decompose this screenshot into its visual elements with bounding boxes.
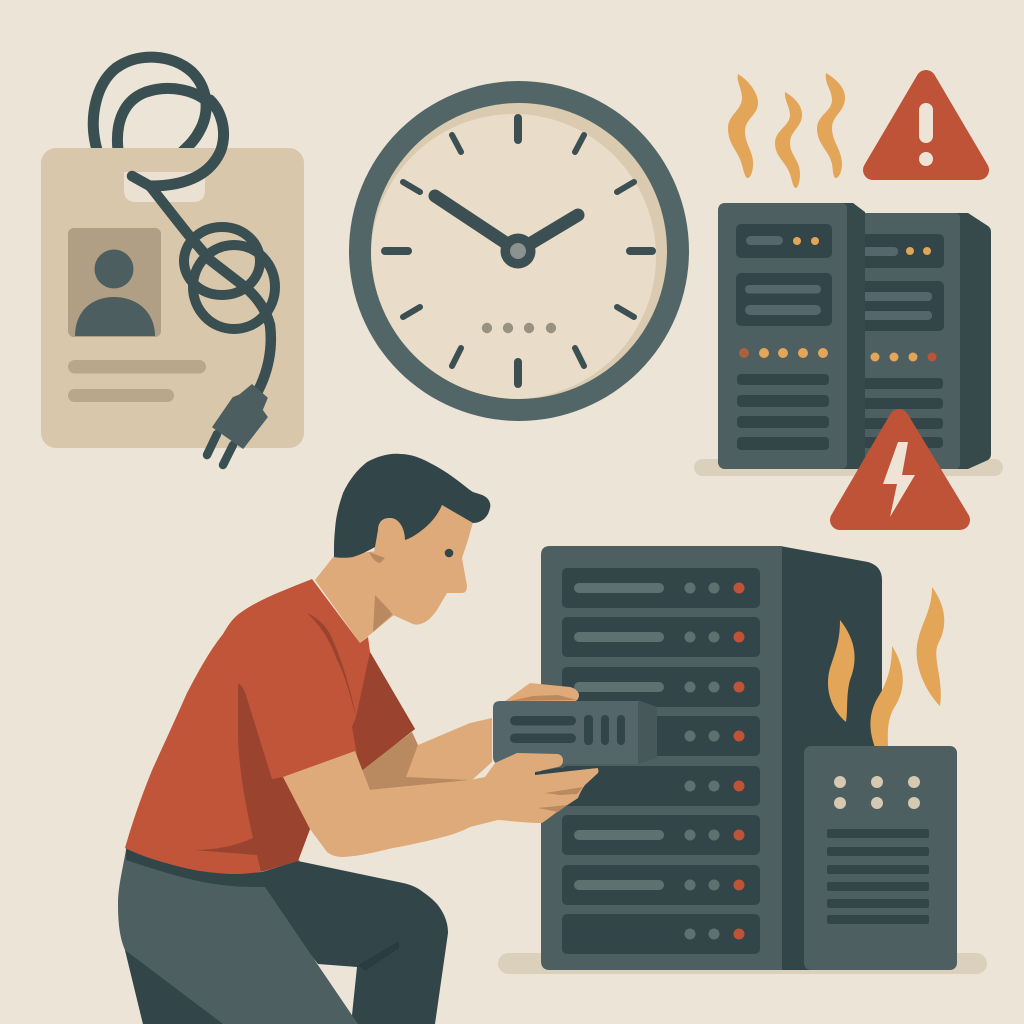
clock hub cap [510,243,526,259]
lower leg shade [125,950,223,1024]
rack front [541,546,782,970]
ear shadow [369,552,385,563]
shirt [125,579,415,874]
far arm [360,718,492,790]
floor shadow [498,953,987,974]
near arm and hand [283,751,598,857]
cord loops behind badge [93,57,212,154]
finger shadows [538,787,583,812]
rack units [562,568,760,954]
clock face shade [371,103,667,399]
left leg [118,850,358,1024]
clock dots [482,323,556,333]
panel: wall clock [349,81,689,421]
panel: upper server racks [694,203,1003,476]
eye [445,549,453,557]
clock face [371,114,656,399]
neck [315,550,400,643]
shirt far sleeve shade [352,652,415,772]
panel: main server rack [498,546,987,974]
figure: technician [118,454,579,1024]
hair [334,454,490,558]
plug [207,385,267,465]
back rack [860,213,991,469]
shirt side shade [193,684,310,872]
far arm shadow [360,732,470,790]
vent dots [834,776,920,809]
clock ticks [385,118,652,384]
neck shadow [373,595,393,632]
clock hub [500,234,536,268]
power cord [132,100,275,393]
badge text lines [68,360,206,402]
badge slot [124,172,205,202]
panel: small server box [804,746,957,970]
flames: main server [828,587,944,750]
icon: warning triangle lightning [840,419,960,520]
icon: warning triangle exclamation [873,80,979,170]
far hand [505,683,579,701]
rack side [780,546,882,970]
panel: ID badge with cord [41,57,304,465]
right leg [250,861,448,1024]
ear [375,518,405,554]
clock hands [435,196,578,251]
waistband [126,846,300,887]
clock ring [349,81,689,421]
vent lines [827,829,929,924]
knee fold [358,941,399,971]
head [374,505,473,625]
floor shadow [694,459,1003,476]
shirt fold [307,613,356,717]
far hand shadow [510,695,577,701]
front rack [718,203,865,469]
finger gap [535,768,597,775]
flames: upper servers [728,73,845,188]
badge card [41,148,304,448]
badge photo [68,228,161,337]
component: power supply unit [493,700,657,764]
